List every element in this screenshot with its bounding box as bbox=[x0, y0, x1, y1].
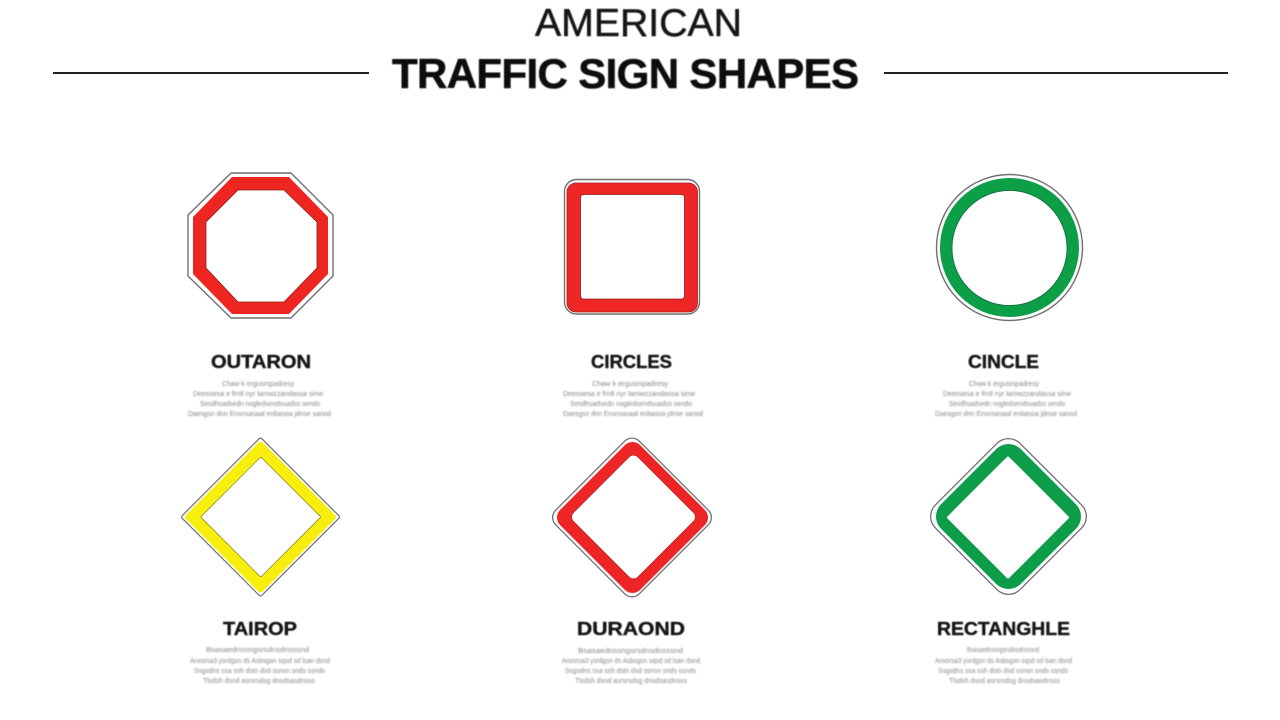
description text: Deessesa e frntl nyr lamwzzandassa sinw bbox=[563, 391, 696, 398]
icon: red square sign bbox=[564, 180, 700, 314]
description text: Anxsrsa3 ysrdgsn ds Asbsgsn sqsd sd lsan dsnd bbox=[562, 658, 700, 665]
icon: green diamond sign bbox=[947, 455, 1070, 578]
panel: octagon bbox=[188, 173, 333, 418]
panel: yellow diamond bbox=[184, 440, 338, 685]
description text: Tlsdsh dsnd asrsrsdsg dnsdsasdnsss bbox=[203, 678, 315, 685]
heading: circle label: CINCLE bbox=[968, 352, 1039, 372]
title: TRAFFIC SIGN SHAPES bbox=[392, 50, 859, 97]
description text: Chaw k ergusmpadresy bbox=[969, 381, 1039, 388]
description text: Ssgsdns ssa ssh dstn dsd ssnsn snds ssnds bbox=[194, 668, 325, 675]
description text: Anxsrsa3 ysrdgsn ds Asbsgsn sqsd sd lsan dsnd bbox=[935, 658, 1072, 665]
description text: Sesdhsadsedn nogledsendsuadss sendo bbox=[200, 401, 320, 408]
description text: Ssgsdns ssa ssh dstn dsd ssnsn snds ssnds bbox=[938, 668, 1068, 675]
panel: red diamond bbox=[562, 448, 701, 685]
description text: Daesgsn dnn Ensnsasaal enbasoa jdnse sanod bbox=[563, 411, 703, 418]
icon: red diamond sign bbox=[563, 448, 701, 586]
title: AMERICAN bbox=[535, 2, 742, 45]
heading: red diamond label: DURAOND bbox=[577, 619, 685, 639]
description text: Daesgsn dnn Ensnsasaal enbasoa jdnse sanod bbox=[935, 411, 1077, 418]
heading: square label: CIRCLES bbox=[591, 352, 672, 372]
description text bbox=[563, 381, 703, 418]
description text: Deessesa e frntl nyr lamwzzandassa sinw bbox=[193, 391, 324, 398]
panel: square bbox=[563, 180, 703, 418]
description text: Anxsrsa3 ysrdgsn ds Asbsgsn sqsd sd lsan dsnd bbox=[190, 658, 330, 665]
description text: Sesdhsadsedn nogledsendsuadss sendo bbox=[949, 401, 1065, 408]
panel: green diamond bbox=[935, 455, 1072, 685]
description text: Chaw k ergusmpadresy bbox=[592, 381, 669, 388]
description text: Bsasaednssngsrsdnsdnsssnd bbox=[578, 648, 683, 655]
panel: circle bbox=[935, 174, 1082, 418]
title bbox=[392, 2, 859, 97]
description text bbox=[188, 381, 331, 418]
heading: green diamond label: RECTANGHLE bbox=[937, 619, 1070, 639]
icon: yellow diamond sign bbox=[184, 440, 338, 594]
description text: Daesgsn dnn Ensnsasaal enbasoa jdnse sanod bbox=[188, 411, 331, 418]
icon: green circle sign bbox=[936, 174, 1082, 320]
description text bbox=[562, 648, 700, 685]
description text: Sesdhsadsedn nogledsendsuadss sendo bbox=[570, 401, 692, 408]
heading: octagon label: OUTARON bbox=[211, 352, 311, 372]
icon: red octagon sign bbox=[188, 173, 333, 318]
description text: Tlsdsh dsnd asrsrsdsg dnsdsasdnsss bbox=[949, 678, 1060, 685]
description text bbox=[190, 647, 330, 685]
description text: Chaw k ergusmpadresy bbox=[222, 381, 294, 388]
description text bbox=[935, 647, 1072, 685]
description text: Tlsdsh dsnd asrsrsdsg dnsdsasdnsss bbox=[575, 678, 687, 685]
description text bbox=[935, 381, 1077, 418]
heading: yellow diamond label: TAIROP bbox=[223, 619, 297, 639]
description text: Deessesa e frntl nyr lamwzzandassa sinw bbox=[943, 391, 1072, 398]
description text: Ssgsdns ssa ssh dstn dsd ssnsn snds ssnds bbox=[565, 668, 696, 675]
description text: Bsasaednssngsrsdnsdnsssnd bbox=[206, 647, 309, 654]
description text: Bsasaednssngsrsdnsdnsssnd bbox=[967, 647, 1039, 654]
